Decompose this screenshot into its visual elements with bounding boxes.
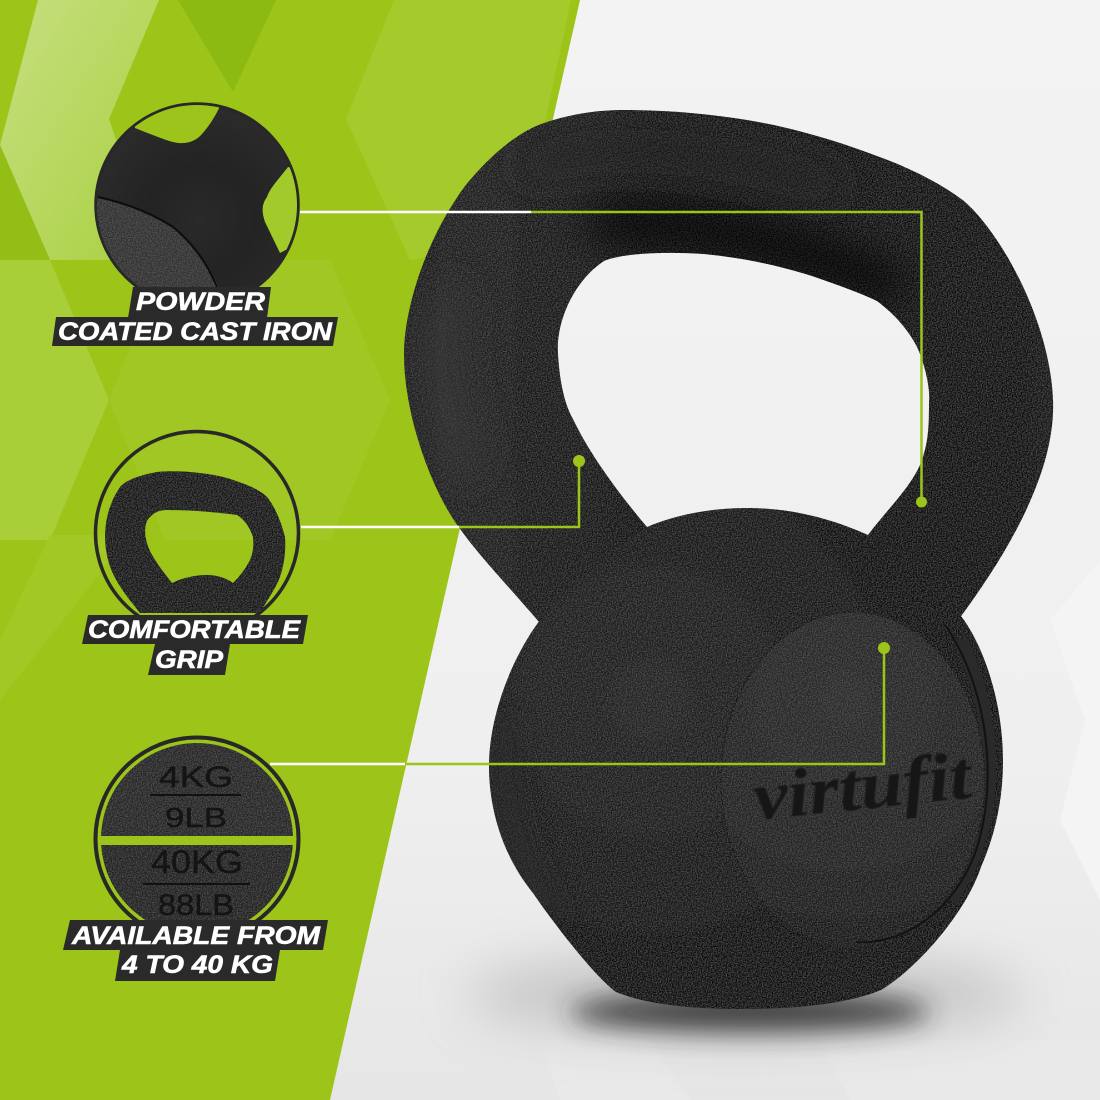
leader: comfortable grip bbox=[301, 455, 585, 527]
main product: kettlebell bbox=[404, 110, 1053, 1009]
kettlebell ball bbox=[489, 508, 1003, 1009]
feature 3: available from 4 to 40 kg bbox=[63, 738, 328, 981]
4 kg marking: 4KG bbox=[159, 761, 233, 794]
feature 1: powder coated cast iron bbox=[52, 95, 338, 346]
badge: powder: POWDER bbox=[136, 288, 265, 316]
feature 2: comfortable grip bbox=[82, 432, 308, 675]
handle shading bbox=[440, 150, 900, 470]
face outer groove bbox=[856, 625, 988, 942]
40 kg marking: 40KG bbox=[151, 844, 243, 880]
circle inset: small kettlebell bbox=[96, 432, 298, 634]
badge: grip bbox=[148, 644, 230, 675]
badge: 4 to 40 kg: 4 TO 40 KG bbox=[121, 951, 273, 979]
embossed logo highlight: virtufit bbox=[752, 738, 979, 837]
9 lb marking: 9LB bbox=[165, 802, 227, 833]
badge: coated cast iron: COATED CAST IRON bbox=[58, 318, 333, 346]
flat ball face bbox=[721, 612, 985, 948]
badge: grip: GRIP bbox=[155, 646, 223, 674]
88 lb marking: 88LB bbox=[158, 889, 234, 922]
background: green slanted panel with hexagon facets bbox=[0, 0, 580, 1100]
leader: powder coated bbox=[300, 212, 927, 508]
background: grey facets bbox=[540, 560, 1100, 1100]
soft floor shadow bbox=[465, 955, 1025, 1035]
ball rim shading bbox=[506, 640, 989, 920]
circle inset: handle joint close-up bbox=[94, 102, 300, 287]
circle inset: weight markings bbox=[96, 738, 298, 941]
badge: comfortable: COMFORTABLE bbox=[88, 616, 301, 644]
embossed logo: virtufit bbox=[750, 736, 977, 835]
leader: weight range bbox=[270, 642, 890, 764]
badge: available from: AVAILABLE FROM bbox=[71, 922, 321, 950]
kettlebell handle bbox=[404, 110, 1053, 640]
